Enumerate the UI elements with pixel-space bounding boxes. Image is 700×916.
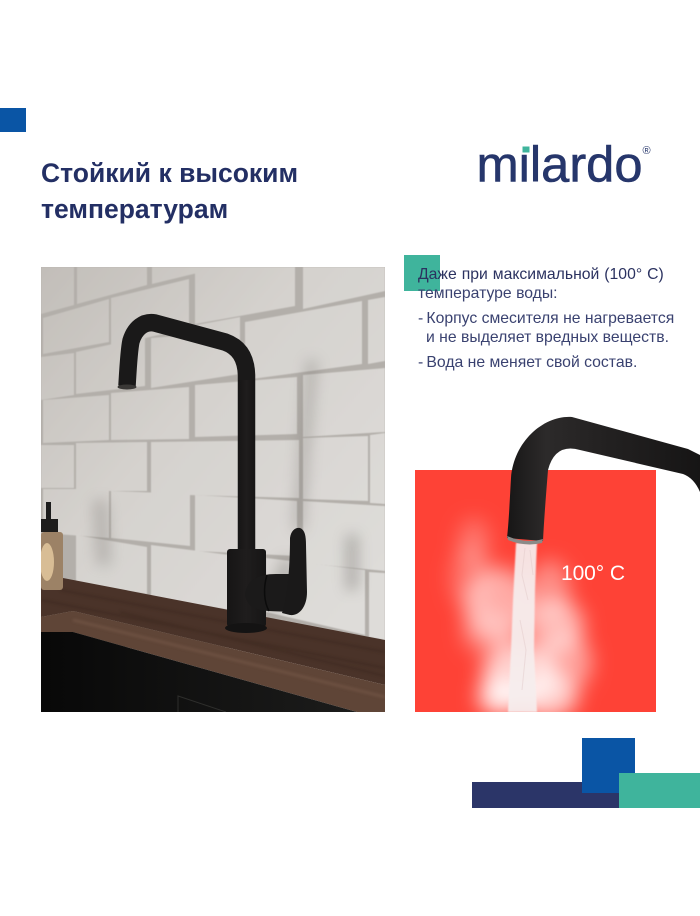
bullet: housing: и не выделяет вредных веществ. [426, 329, 669, 346]
temperature label: 100° C [561, 562, 625, 585]
red heat panel [415, 470, 656, 712]
spout [507, 417, 700, 541]
description text [418, 266, 674, 371]
kitchen photo illustration [41, 267, 385, 712]
decorative teal square [404, 255, 440, 291]
bottom decorative blocks [472, 738, 700, 808]
title: температурам [41, 194, 228, 224]
decorative blue square [0, 108, 26, 132]
bottle [40, 502, 63, 590]
spout with hot water and steam [441, 416, 700, 712]
bullet: water: - Вода не меняет свой состав. [418, 354, 637, 371]
aerator [507, 536, 543, 544]
steam [450, 518, 592, 719]
bullet: housing: - Корпус смесителя не нагревается [418, 310, 674, 327]
title: Стойкий к высоким [41, 158, 298, 188]
bullet: housing [418, 310, 674, 346]
intro line 1: Даже при максимальной (100° C) [418, 266, 664, 283]
tiled wall [41, 267, 385, 647]
wooden countertop [41, 578, 385, 712]
black sink [41, 632, 357, 712]
water stream [508, 543, 537, 712]
logo: milardo: ® [642, 145, 651, 157]
faucet [118, 323, 307, 633]
intro line 2: температуре воды: [418, 285, 558, 302]
title [41, 158, 298, 224]
